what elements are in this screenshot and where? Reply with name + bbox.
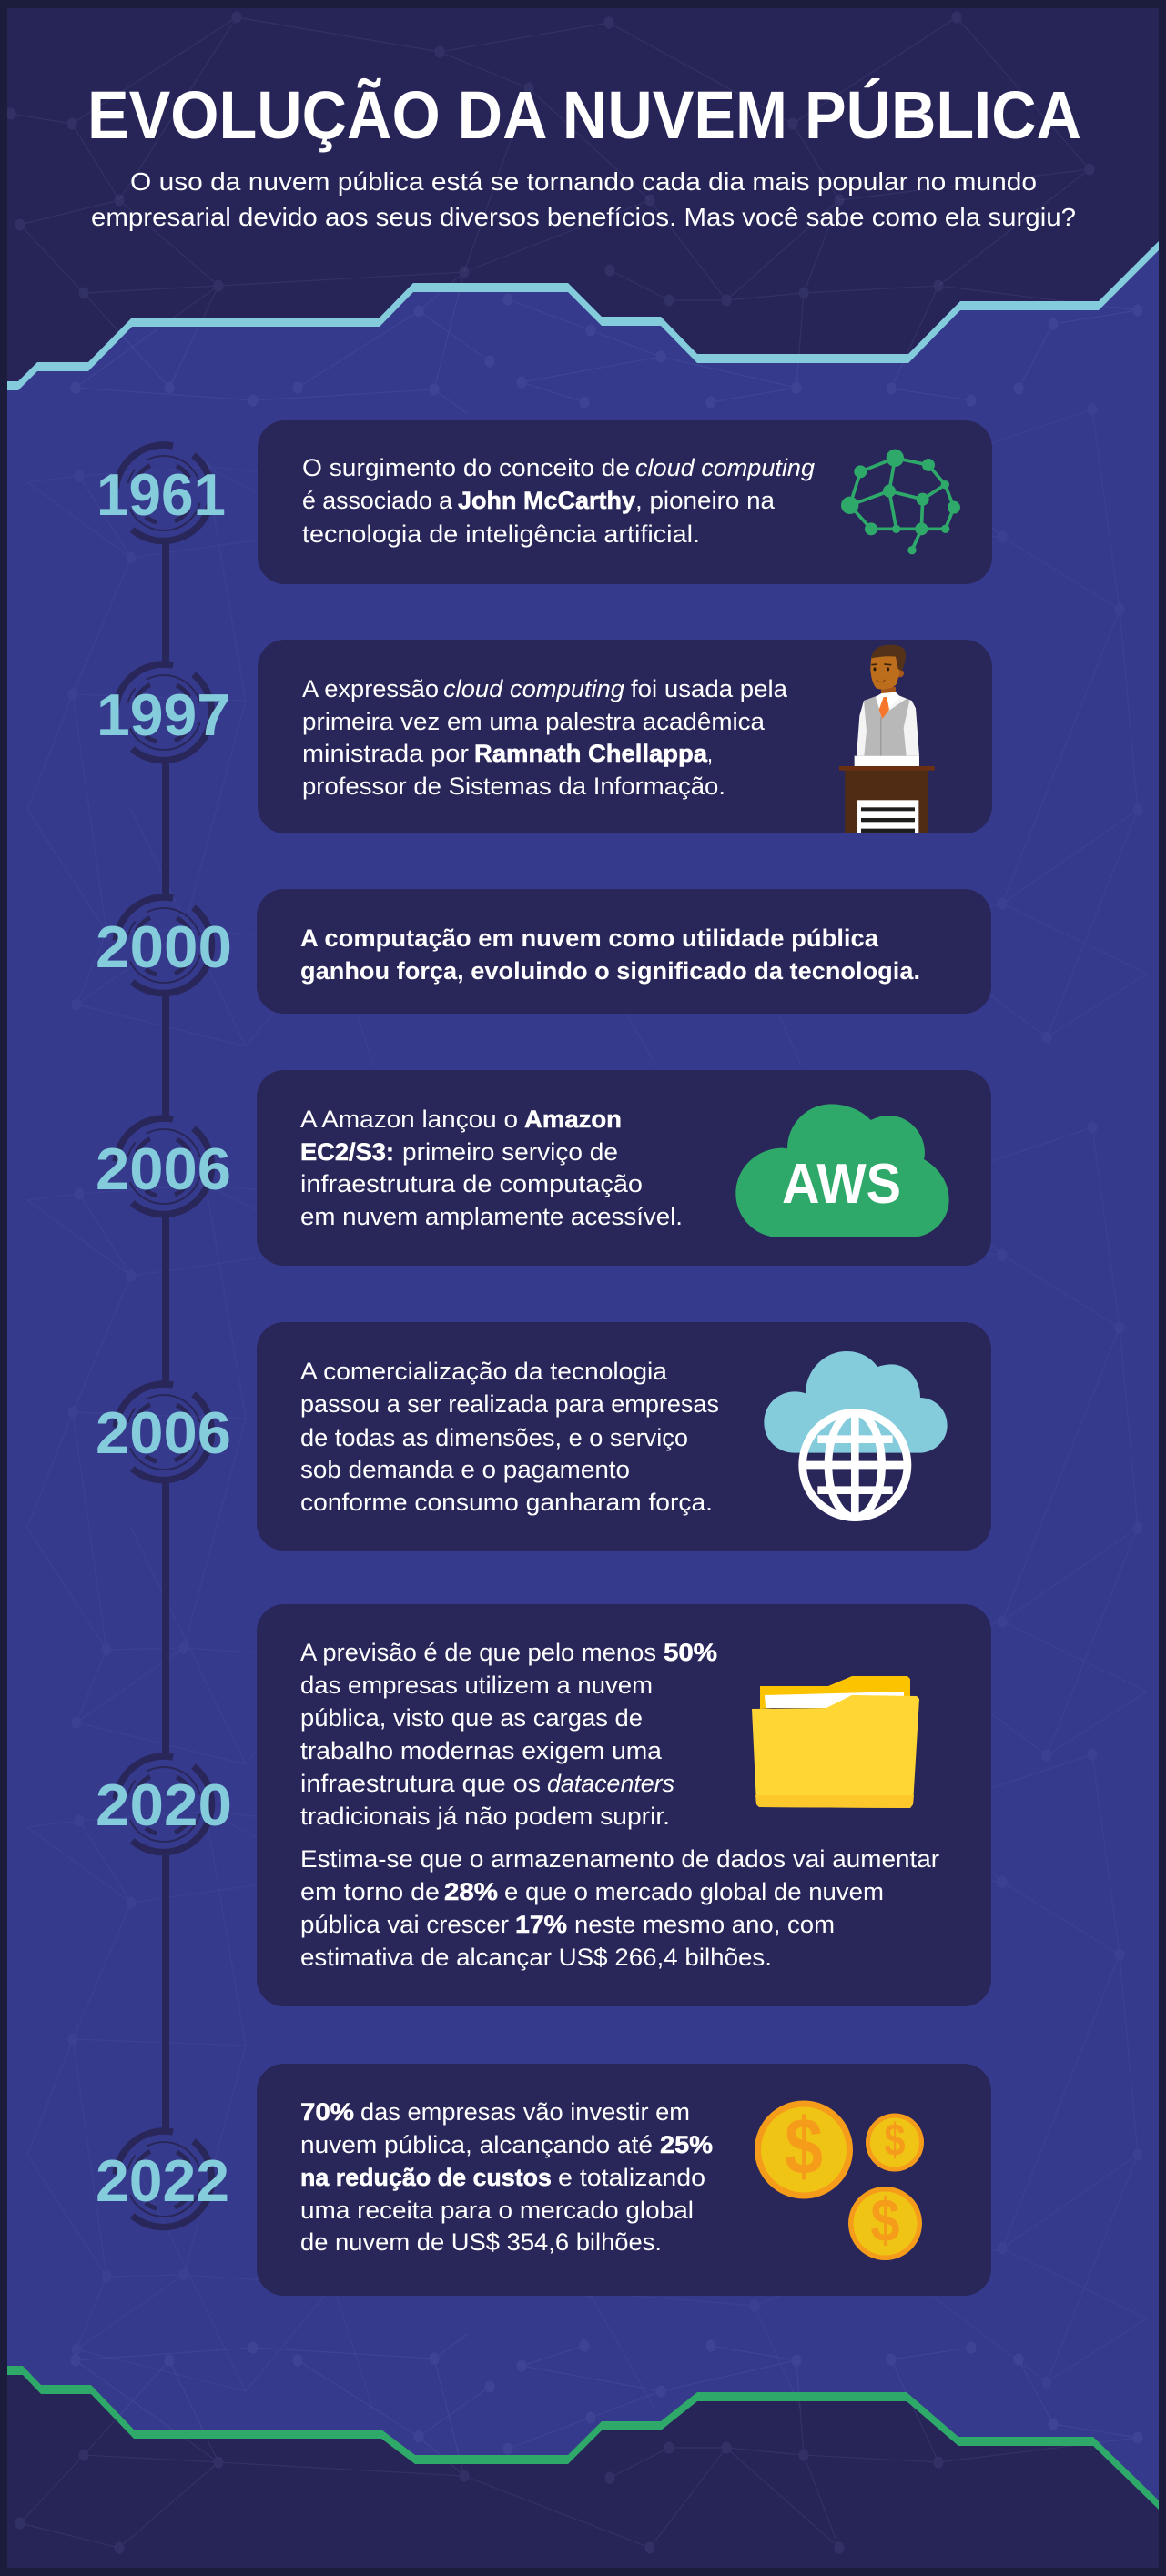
text: 2006 commercialization: de todas as dimensões, e o serviço xyxy=(300,1424,688,1451)
marker ring 2022 xyxy=(116,2131,211,2227)
text: 2022: das empresas vão investir em xyxy=(360,2098,690,2126)
text: 2020 first paragraph: datacenters xyxy=(547,1770,674,1797)
text: 1997: professor de Sistemas da Informação. xyxy=(302,773,725,800)
text: 1961: é associado a xyxy=(302,487,453,514)
icon: cloud and globe xyxy=(764,1351,948,1518)
text: 1961: , pioneiro na xyxy=(635,487,776,514)
marker ring 1961 xyxy=(116,445,211,541)
year 2006: 2006 xyxy=(96,1136,231,1202)
icon: gold coins: $ xyxy=(870,2187,899,2255)
text: 2020 second paragraph: Estima-se que o armazenamento de dados vai aumentar xyxy=(300,1845,939,1873)
year 2020: 2020 xyxy=(96,1772,232,1838)
text: 1961: John McCarthy xyxy=(458,487,635,514)
panel: 1997 xyxy=(258,640,992,833)
text: 1961 xyxy=(302,454,815,548)
year 1997: 1997 xyxy=(96,682,230,748)
marker ring 1997 xyxy=(116,664,211,761)
text: 2006 Amazon xyxy=(300,1106,683,1230)
bottom green stepped line xyxy=(7,2366,1159,2510)
icon: speaker at podium xyxy=(839,645,935,833)
text: 2020 first paragraph: tradicionais já não podem suprir. xyxy=(300,1803,670,1830)
panel: 2022 xyxy=(257,2064,991,2296)
text: 1997: primeira vez em uma palestra acadêmica xyxy=(302,708,766,735)
text: 2020 first paragraph: infraestrutura que os xyxy=(300,1770,541,1797)
subtitle xyxy=(91,167,1076,231)
text: 2006 Amazon: A Amazon lançou o xyxy=(300,1106,518,1133)
year 1961: 1961 xyxy=(96,461,226,528)
text: 2020 second paragraph: e que o mercado global de nuvem xyxy=(504,1878,884,1905)
icon: AWS cloud: AWS xyxy=(782,1153,901,1216)
text: 2000: A computação em nuvem como utilidade pública xyxy=(300,924,879,952)
text: 1997: cloud computing xyxy=(443,675,624,702)
timeline item: 2022 xyxy=(96,2064,991,2296)
marker ring 2006 xyxy=(116,1118,211,1215)
text: 2022 xyxy=(300,2098,713,2256)
text: 2000 xyxy=(300,924,920,985)
text: 2022: e totalizando xyxy=(558,2164,705,2191)
text: 2022: 70% xyxy=(300,2098,354,2126)
text: 2022: na redução de custos xyxy=(300,2164,552,2191)
year 2000: 2000 xyxy=(96,914,232,980)
text: 1997: Ramnath Chellappa xyxy=(474,740,708,767)
text: 1997: ministrada por xyxy=(302,740,469,767)
text: 2020 first paragraph: A previsão é de que pelo menos xyxy=(300,1639,656,1666)
marker ring 2020 xyxy=(116,1756,211,1853)
text: 1961: O surgimento do conceito de xyxy=(302,454,630,481)
text: 2006 commercialization: conforme consumo ganharam força. xyxy=(300,1489,713,1516)
timeline item: 2006 Amazon xyxy=(96,1070,991,1266)
panel: 2006 Amazon xyxy=(257,1070,991,1266)
text: 2022: 25% xyxy=(660,2131,713,2158)
timeline connector xyxy=(162,543,169,2129)
text: 1961: cloud computing xyxy=(635,454,815,481)
subtitle: empresarial devido aos seus diversos benefícios. Mas você sabe como ela surgiu? xyxy=(91,203,1076,231)
panel: 2020 xyxy=(257,1604,991,2006)
text: 2006 commercialization: sob demanda e o pagamento xyxy=(300,1456,630,1483)
text: 2020 first paragraph: pública, visto que as cargas de xyxy=(300,1704,643,1732)
icon: gold coins: $ xyxy=(785,2101,823,2191)
text: 2006 commercialization xyxy=(300,1358,719,1516)
icon: gold coins xyxy=(755,2100,924,2260)
text: 1961: tecnologia de inteligência artificial. xyxy=(302,520,700,548)
text: 2020 second paragraph: neste mesmo ano, com xyxy=(574,1911,835,1938)
text: 2020 first paragraph: 50% xyxy=(664,1639,717,1666)
text: 2020 first paragraph: trabalho modernas exigem uma xyxy=(300,1737,663,1764)
text: 1997 xyxy=(302,675,788,800)
timeline item: 1961 xyxy=(96,420,992,584)
text: 2022: uma receita para o mercado global xyxy=(300,2197,694,2224)
text: 2006 Amazon: EC2/S3: xyxy=(300,1138,394,1166)
text: 2020 second paragraph: estimativa de alcançar US$ 266,4 bilhões. xyxy=(300,1944,772,1971)
icon: AWS cloud xyxy=(735,1104,949,1237)
text: 2000: ganhou força, evoluindo o significado da tecnologia. xyxy=(300,957,920,985)
panel: 2000 xyxy=(257,889,991,1014)
icon: yellow folder xyxy=(752,1676,919,1808)
text: 2006 commercialization: passou a ser realizada para empresas xyxy=(300,1390,719,1418)
year 2006 second: 2006 xyxy=(96,1399,231,1466)
text: 1997: foi usada pela xyxy=(631,675,788,702)
marker ring 2000 xyxy=(116,897,211,994)
text: 2020 first paragraph: das empresas utilizem a nuvem xyxy=(300,1672,653,1699)
icon: brain network xyxy=(841,450,960,554)
year 2022: 2022 xyxy=(96,2147,229,2214)
text: 2020 first paragraph xyxy=(300,1639,717,1830)
text: 2020 second paragraph: em torno de xyxy=(300,1878,440,1905)
text: 2020 second paragraph: 17% xyxy=(515,1911,567,1938)
timeline item: 2006 commercialization xyxy=(96,1322,991,1551)
title: EVOLUÇÃO DA NUVEM PÚBLICA xyxy=(87,77,1081,153)
text: 2006 Amazon: em nuvem amplamente acessível. xyxy=(300,1203,683,1230)
subtitle: O uso da nuvem pública está se tornando cada dia mais popular no mundo xyxy=(130,167,1037,196)
text: 2020 second paragraph: pública vai crescer xyxy=(300,1911,509,1938)
timeline item: 2000 xyxy=(96,889,991,1014)
marker ring 2006 second xyxy=(116,1384,211,1480)
text: 2006 Amazon: primeiro serviço de xyxy=(402,1138,618,1166)
text: 2006 Amazon: infraestrutura de computação xyxy=(300,1170,643,1197)
top light-blue stepped line xyxy=(7,241,1159,390)
text: 2006 commercialization: A comercialização da tecnologia xyxy=(300,1358,668,1385)
panel: 2006 commercialization xyxy=(257,1322,991,1551)
text: 1997: , xyxy=(707,740,713,767)
text: 2022: nuvem pública, alcançando até xyxy=(300,2131,653,2158)
text: 1997: A expressão xyxy=(302,675,439,702)
timeline item: 1997 xyxy=(96,640,992,833)
text: 2020 second paragraph: 28% xyxy=(444,1878,498,1905)
text: 2022: de nuvem de US$ 354,6 bilhões. xyxy=(300,2228,662,2256)
text: 2020 second paragraph xyxy=(300,1845,939,1971)
timeline item: 2020 xyxy=(96,1604,991,2006)
panel: 1961 xyxy=(258,420,992,584)
text: 2006 Amazon: Amazon xyxy=(524,1106,622,1133)
icon: gold coins: $ xyxy=(885,2115,906,2166)
